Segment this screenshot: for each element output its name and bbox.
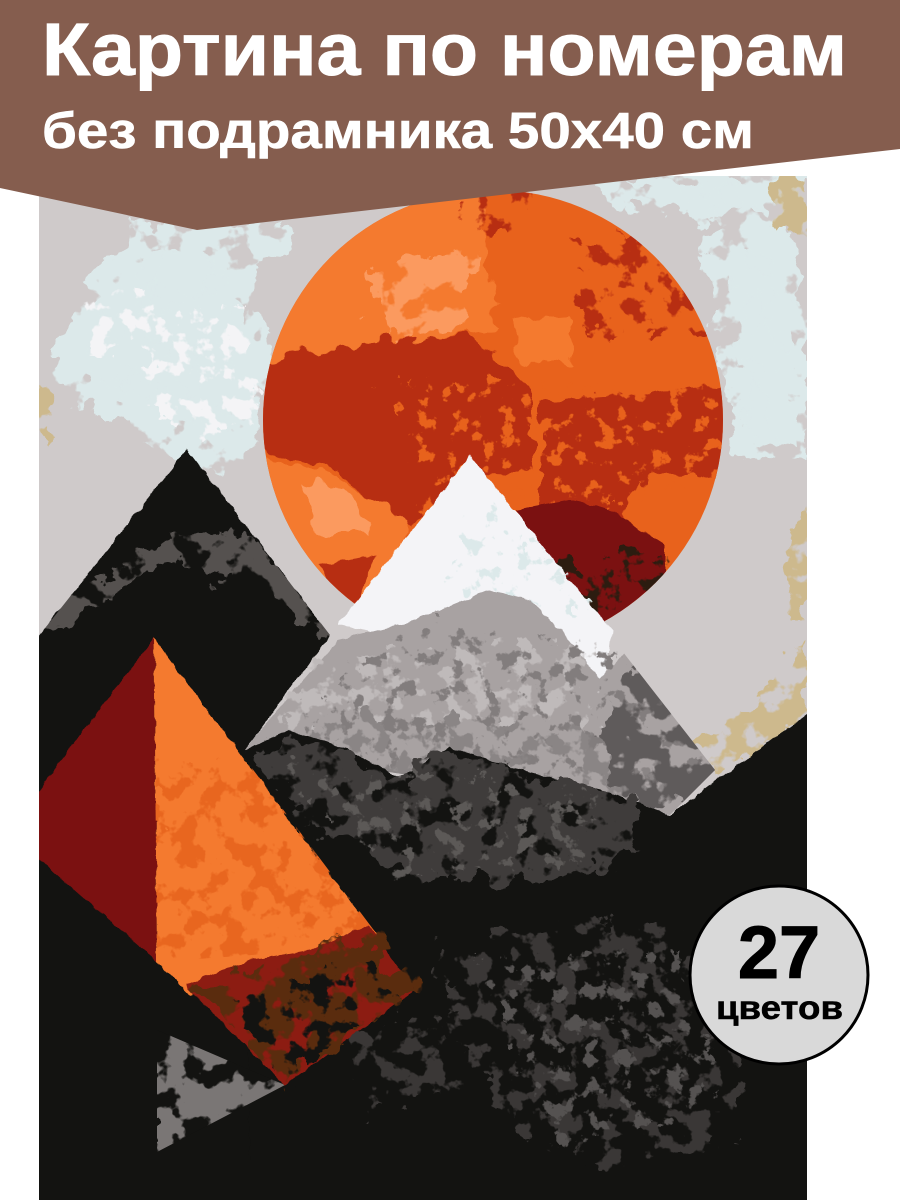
black mountain mist: [44, 527, 330, 640]
pyramid orange face: [154, 638, 385, 995]
light grey mottling: [280, 640, 600, 740]
mid grey mottling: [260, 620, 720, 780]
badge circle: [690, 886, 868, 1064]
ground bottom fill: [51, 1198, 807, 1200]
grey mountain: [245, 590, 715, 815]
pale blue cloud cores: [75, 180, 800, 450]
dark ridge light flecks: [270, 760, 600, 880]
ochre patches: [36, 180, 810, 775]
sun orange flecks in red: [390, 380, 730, 520]
sun maroon: [516, 500, 666, 622]
painting: [0, 170, 812, 1200]
left black mountain: [39, 448, 330, 1160]
pyramid lower grey face: [157, 1036, 284, 1152]
dark right slope: [594, 665, 715, 809]
sun base: [263, 192, 723, 622]
dark ridge mottling: [250, 735, 640, 880]
sun lower-left orange: [266, 457, 409, 604]
foot brown speckle: [195, 935, 415, 1085]
pale blue clouds: [50, 170, 810, 475]
grey mountain base: [245, 590, 715, 815]
badge number: 27: [738, 911, 820, 994]
subtitle: без подрамника 50х40 см: [42, 102, 754, 159]
badge label: цветов: [716, 989, 843, 1026]
pyramid maroon face: [39, 637, 158, 962]
sky background: [39, 176, 807, 816]
sun dark base: [556, 544, 670, 612]
foot black speckle: [225, 960, 400, 1080]
white peak: [338, 456, 612, 690]
sun: [263, 192, 723, 622]
dark mottles: [340, 920, 740, 1170]
sun red bands: [240, 335, 750, 530]
title: Картина по номерам: [42, 8, 847, 91]
pyramid: [20, 638, 415, 1160]
sun light orange: [270, 198, 574, 368]
pyramid orange darker mottles: [156, 758, 376, 958]
sun lower red tip: [318, 556, 376, 604]
colour count badge: [690, 886, 868, 1064]
sun pale orange highlight: [370, 250, 480, 345]
header banner: [0, 0, 900, 230]
sun red mottling top right: [470, 180, 710, 335]
foot red base: [185, 925, 415, 1085]
white cloud accents: [80, 285, 260, 440]
dark ground: [245, 710, 812, 1200]
ground lighter flecks: [480, 950, 720, 1150]
pyramid foot: [185, 925, 415, 1085]
lower grey band: [270, 715, 700, 815]
pale flecks on white peak: [450, 500, 590, 620]
